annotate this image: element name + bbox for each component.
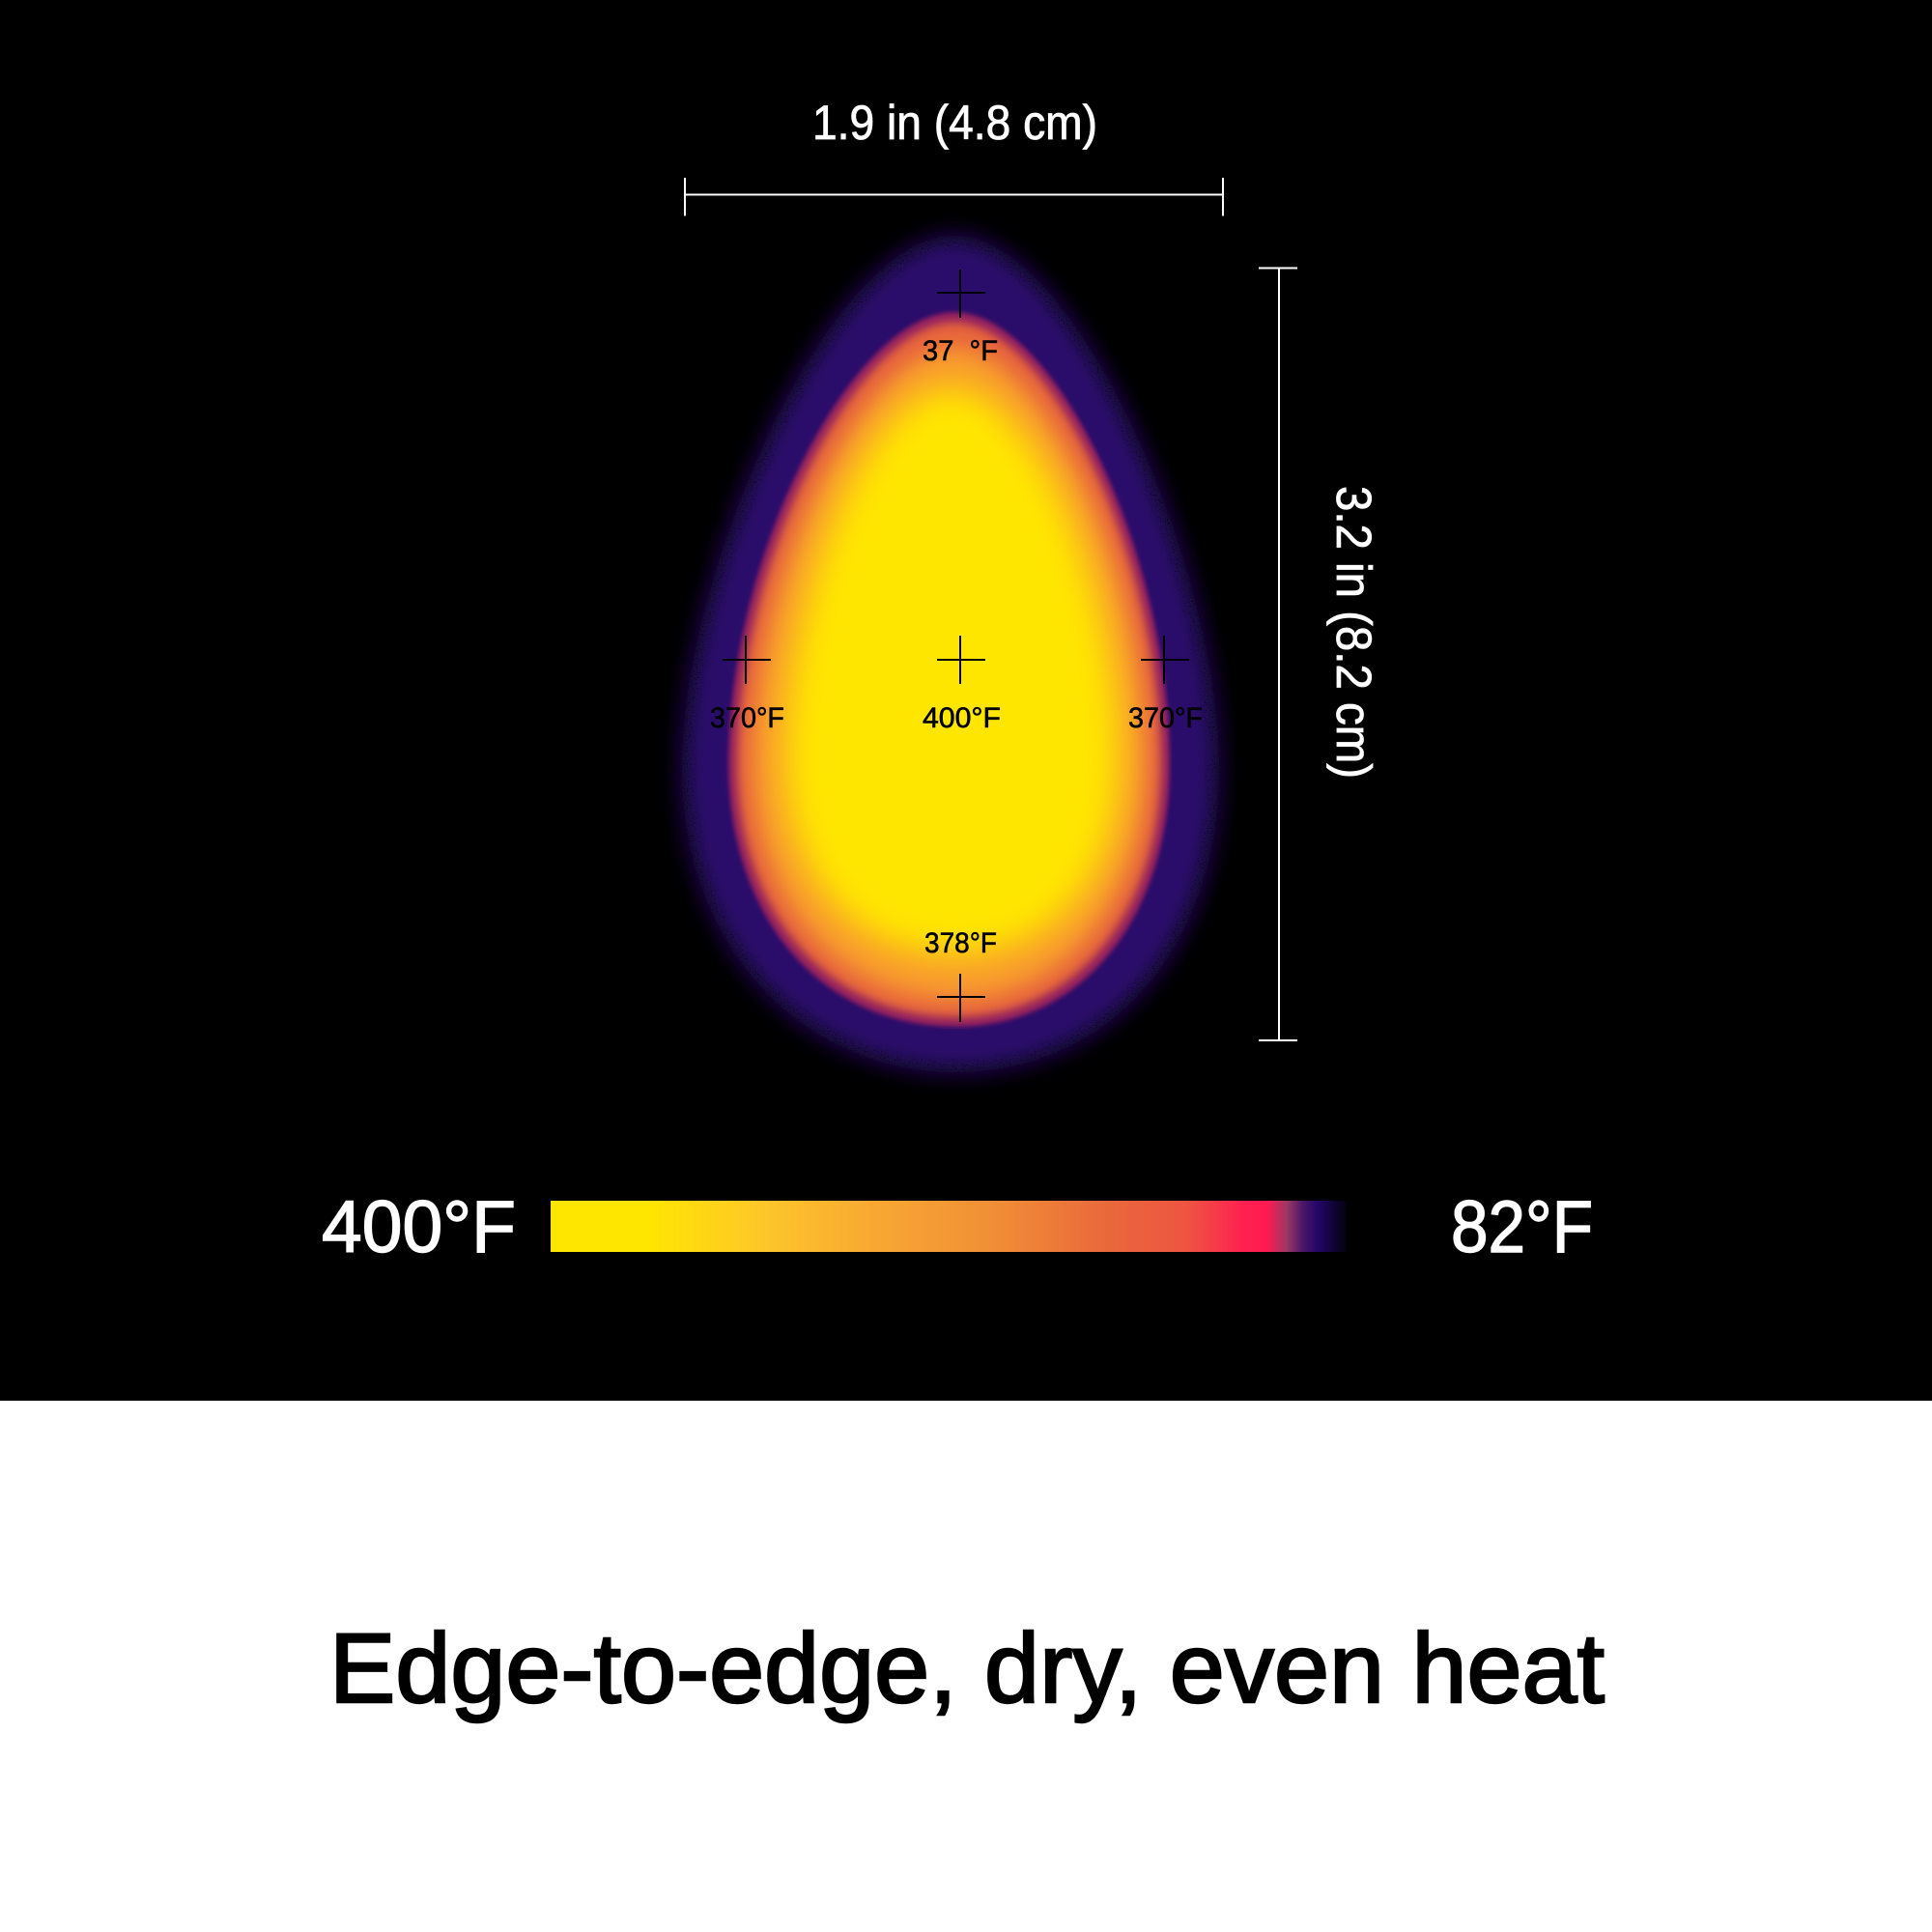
legend: maximum temperature: 400°F <box>322 1186 516 1268</box>
temperature label: center: 400°F <box>923 702 1001 734</box>
measurement point: top cross <box>937 270 985 318</box>
panel: black thermal background <box>0 0 1932 1401</box>
heat map: egg-shaped thermal image <box>682 236 1219 1072</box>
measurement point: bottom cross <box>937 974 985 1022</box>
height label: 3.2 in (8.2 cm) <box>1326 486 1381 779</box>
height dimension bracket <box>1259 269 1297 1040</box>
caption headline: Edge-to-edge, dry, even heat <box>329 1613 1605 1723</box>
measurement point: left cross <box>723 636 771 684</box>
width dimension bracket <box>685 178 1223 216</box>
temperature label: bottom: 378°F <box>924 927 997 959</box>
temperature label: top: 37 °F <box>923 335 998 367</box>
panel: white caption band <box>0 1401 1932 1932</box>
measurement point: right cross <box>1141 636 1189 684</box>
legend: colour scale bar <box>551 1201 1347 1252</box>
temperature label: left: 370°F <box>710 702 784 734</box>
temperature label: right: 370°F <box>1128 702 1203 734</box>
measurement point: center cross <box>937 636 985 684</box>
legend: minimum temperature: 82°F <box>1451 1186 1593 1268</box>
width label: 1.9 in (4.8 cm) <box>812 96 1097 150</box>
